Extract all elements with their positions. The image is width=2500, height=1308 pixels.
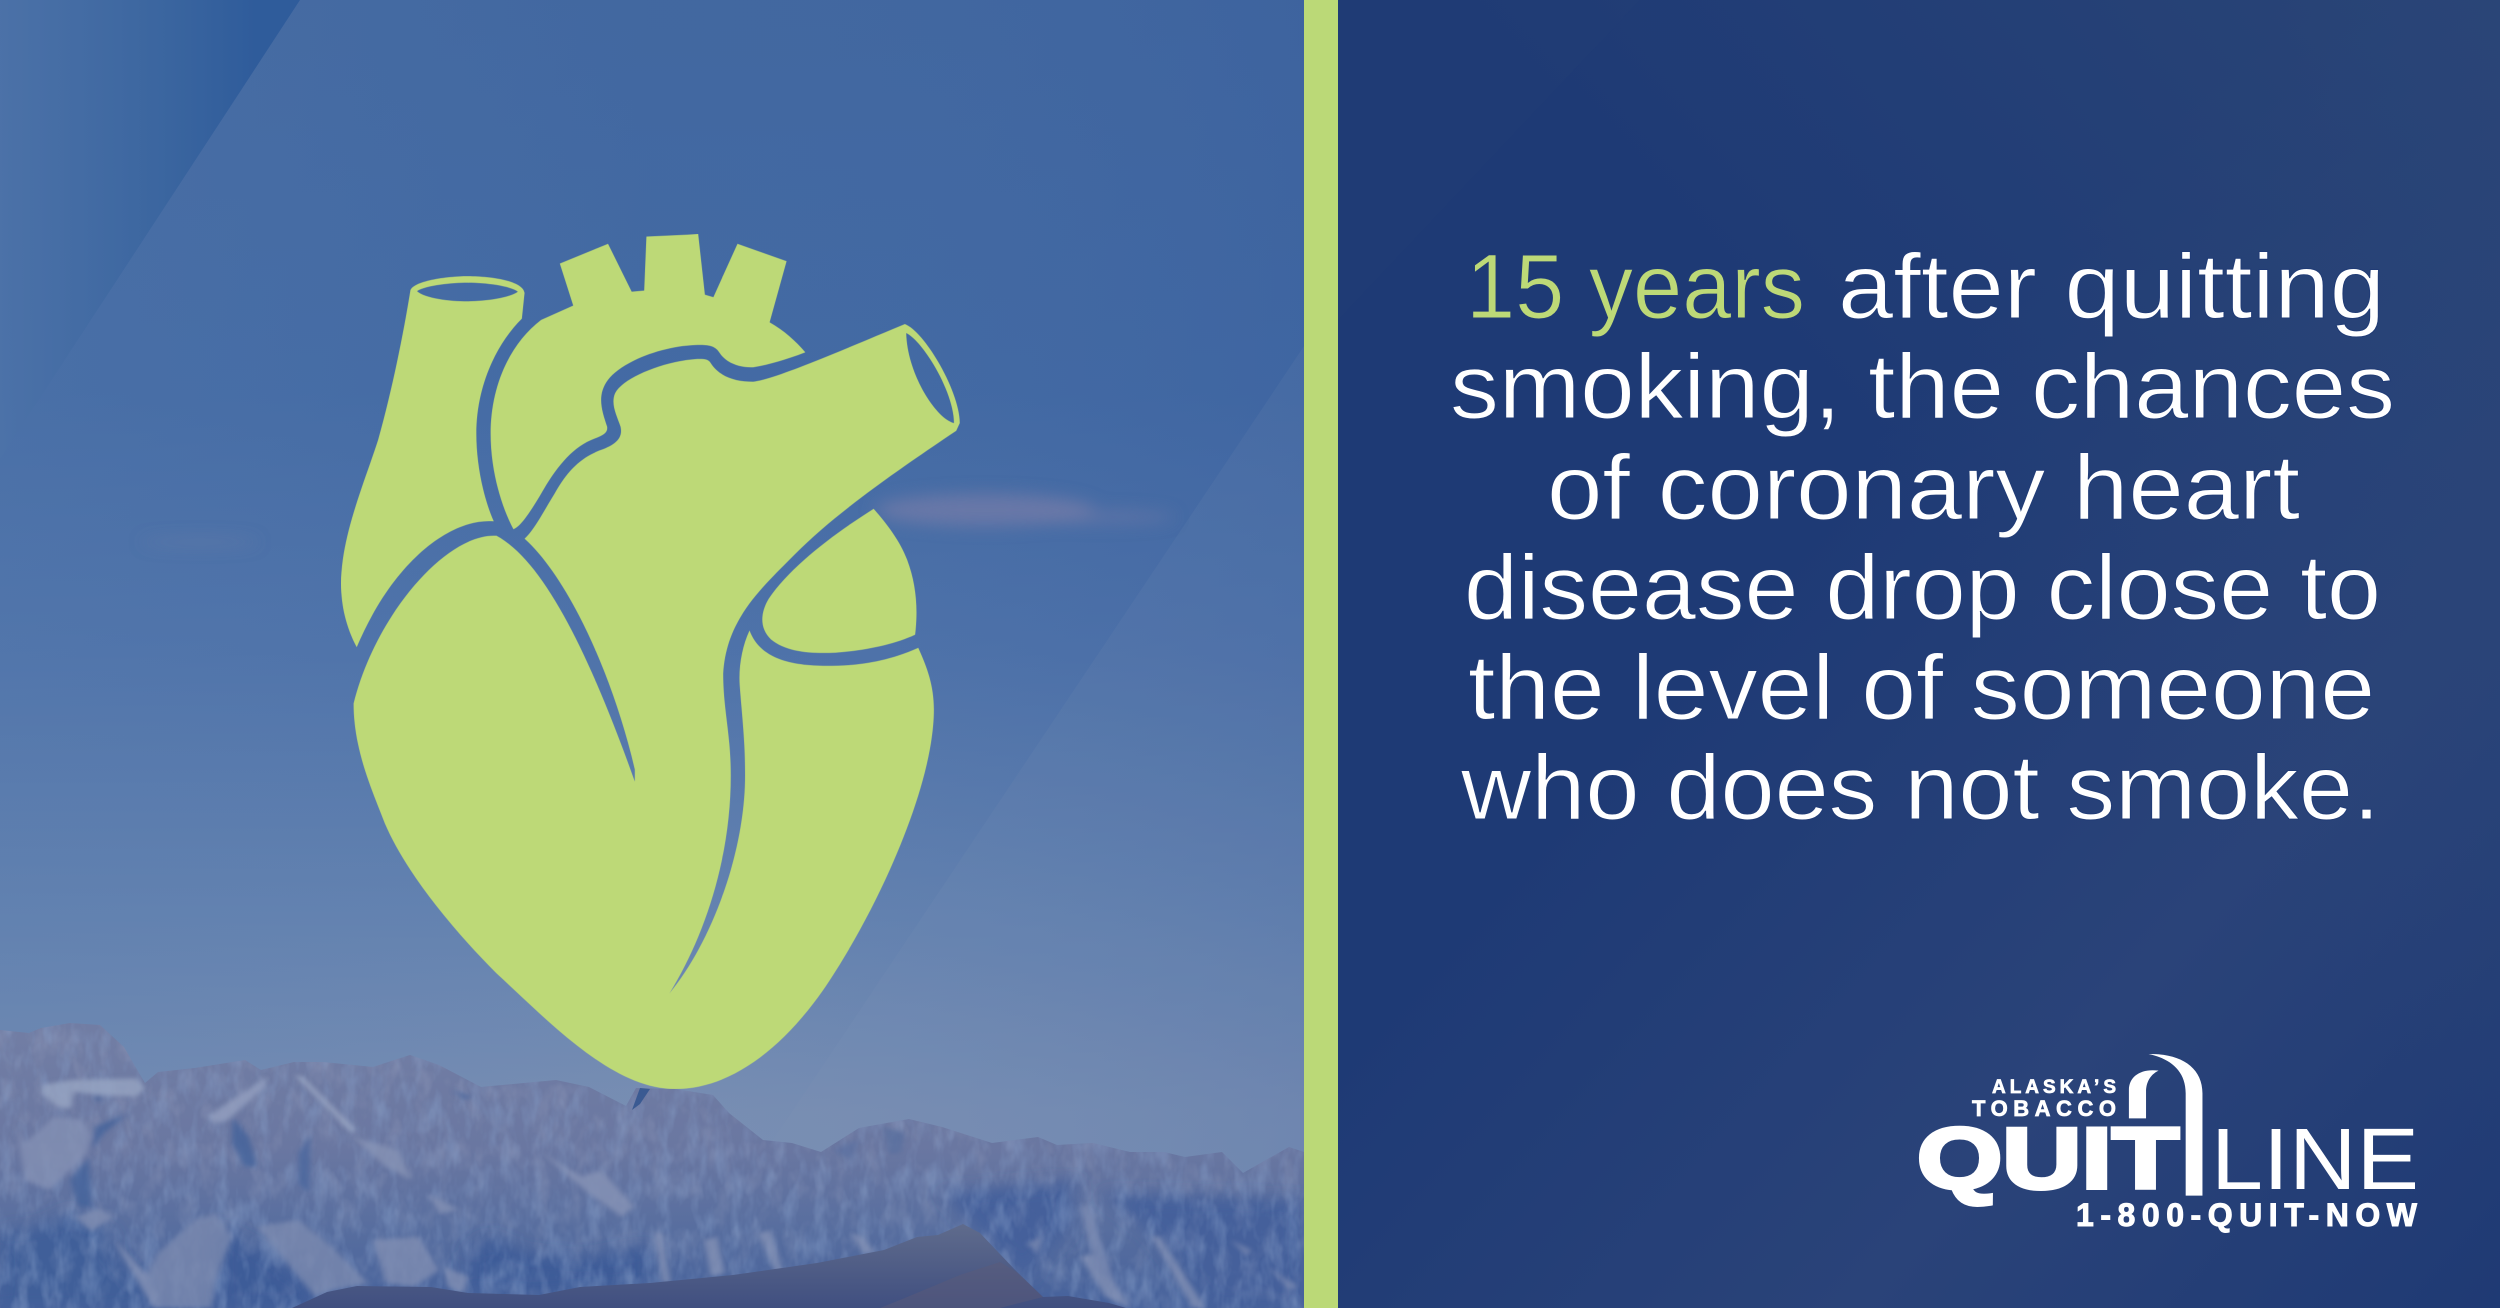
logo text: Alaska's: ALASKA’S xyxy=(1992,1077,2116,1098)
cloud wisp xyxy=(140,494,1175,547)
line 3: of coronary heart xyxy=(1547,437,2300,539)
highlight: 15 years: 15 years xyxy=(1466,236,1805,338)
icon: anatomical heart xyxy=(341,234,960,1089)
line 4: disease drop close to xyxy=(1464,537,2381,639)
panel: sky and mountain photo xyxy=(0,0,1305,1308)
line 5: the level of someone xyxy=(1468,637,2375,739)
sky background xyxy=(0,0,1304,1308)
ventricles and pulmonary artery xyxy=(354,324,960,1089)
line 1: after quitting xyxy=(1838,236,2385,338)
logo text: Quit: QUIT xyxy=(1917,1111,2179,1207)
logo text: phone number: 1-800-QUIT-NOW xyxy=(2076,1197,2418,1233)
panel: navy message panel xyxy=(1338,0,2500,1308)
broad shaded areas xyxy=(0,1210,650,1308)
light beam: lower-right xyxy=(773,346,1304,1308)
line 6: who does not smoke. xyxy=(1460,737,2380,839)
logo: Alaska's Tobacco Quit Line xyxy=(1917,1054,2419,1233)
logo mark: arch xyxy=(2129,1054,2202,1196)
light beam: top-left corner xyxy=(0,0,300,459)
foreground ridge xyxy=(292,1224,1126,1308)
logo text: Tobacco: TOBACCO xyxy=(1972,1096,2116,1121)
message text xyxy=(1450,236,2395,839)
mountain range xyxy=(0,1020,1305,1308)
upper vessels xyxy=(491,234,805,529)
logo text: Line: LINE xyxy=(2211,1111,2419,1208)
aorta xyxy=(341,276,525,647)
line 2: smoking, the chances xyxy=(1450,336,2395,438)
right atrium xyxy=(762,509,916,653)
green divider bar xyxy=(1304,0,1338,1308)
